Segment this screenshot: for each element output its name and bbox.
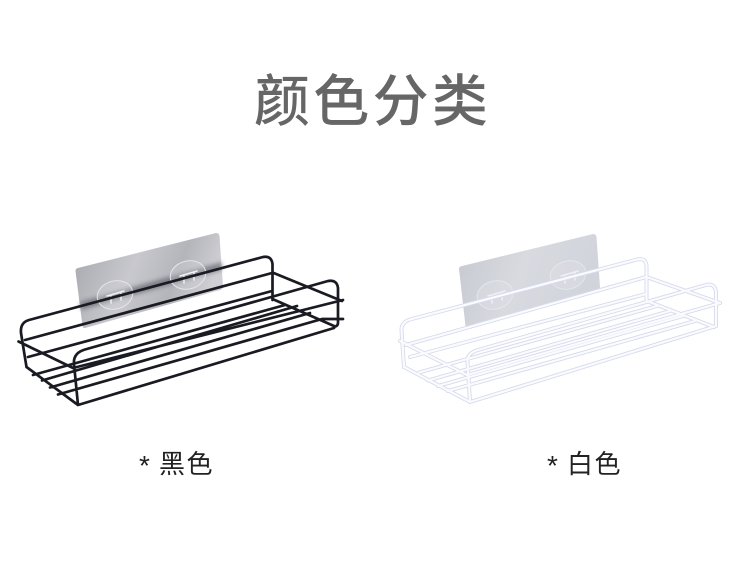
black rack xyxy=(18,233,343,405)
mounting plate: black rack xyxy=(76,233,223,328)
wire basket: black xyxy=(18,257,343,405)
label: black: 黑色 xyxy=(159,449,214,479)
white rack xyxy=(400,234,720,402)
mounting plate: white rack xyxy=(459,234,600,328)
label: white xyxy=(547,449,622,481)
wire basket: white xyxy=(400,259,720,402)
suction hooks: black rack xyxy=(94,257,209,313)
label: black xyxy=(139,449,214,481)
label: black: * xyxy=(139,450,150,481)
title: 颜色分类 xyxy=(254,70,491,133)
suction hooks: white rack xyxy=(474,257,589,313)
label: white: 白色 xyxy=(567,449,622,479)
label: white: * xyxy=(547,450,558,481)
